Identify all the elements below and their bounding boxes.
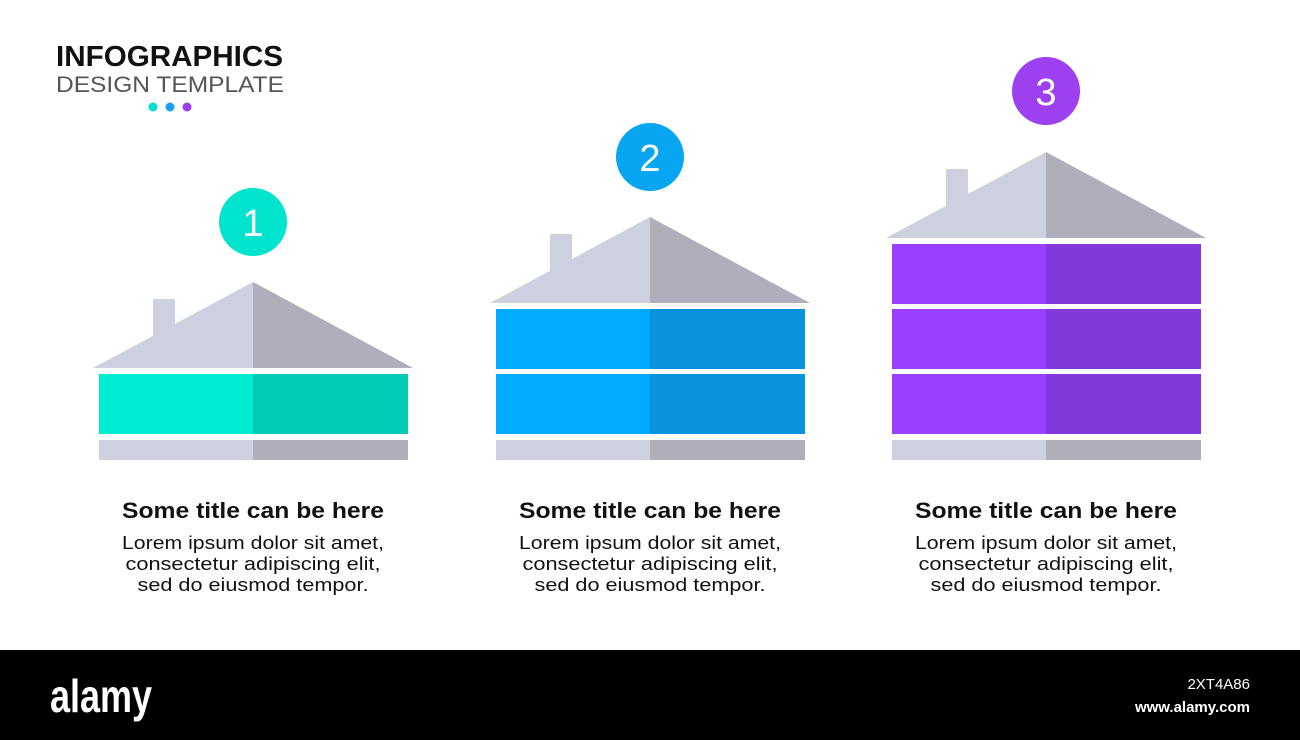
text block 3	[915, 498, 1177, 595]
house 3	[886, 152, 1206, 460]
text block 2: Lorem ipsum dolor sit amet,	[519, 533, 781, 553]
text block 2: sed do eiusmod tempor.	[534, 575, 766, 595]
badge 2: 2	[639, 138, 661, 180]
badge 3	[1012, 57, 1080, 125]
text block 3: consectetur adipiscing elit,	[918, 554, 1174, 574]
badge 3: 3	[1035, 72, 1057, 114]
text block 1: sed do eiusmod tempor.	[138, 575, 368, 595]
text block 1: consectetur adipiscing elit,	[126, 554, 380, 574]
title: DESIGN TEMPLATE	[56, 72, 284, 97]
text block 2	[519, 498, 781, 595]
house 1	[93, 282, 413, 460]
badge 1: 1	[242, 203, 264, 245]
title	[56, 41, 284, 112]
footer bar: alamy	[50, 670, 152, 722]
footer bar: 2XT4A86	[1187, 676, 1250, 693]
text block 2: Some title can be here	[519, 498, 781, 523]
footer bar: www.alamy.com	[1134, 699, 1250, 716]
text block 2: consectetur adipiscing elit,	[522, 554, 778, 574]
house 2	[490, 217, 810, 460]
title: INFOGRAPHICS	[56, 41, 283, 73]
footer bar	[0, 650, 1300, 740]
badge 2	[616, 123, 684, 191]
text block 1: Lorem ipsum dolor sit amet,	[122, 533, 384, 553]
text block 3: Lorem ipsum dolor sit amet,	[915, 533, 1177, 553]
text block 3: Some title can be here	[915, 498, 1177, 523]
badge 1	[219, 188, 287, 256]
text block 1: Some title can be here	[122, 498, 384, 523]
text block 3: sed do eiusmod tempor.	[930, 575, 1162, 595]
text block 1	[122, 498, 384, 595]
